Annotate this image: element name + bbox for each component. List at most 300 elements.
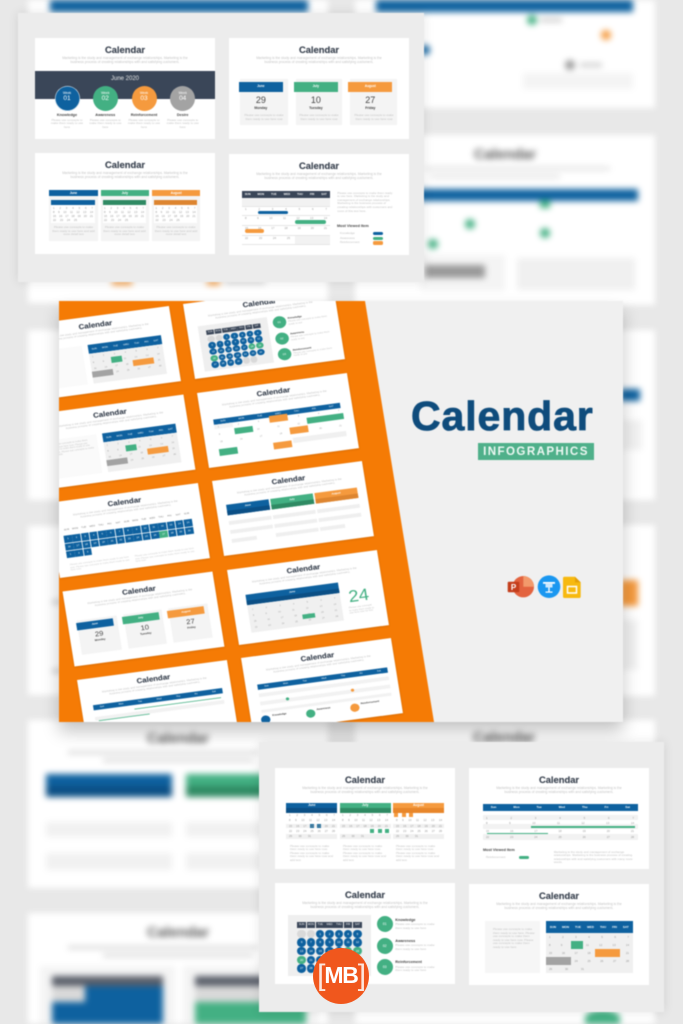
tilted slide: fifteen-day grid: 25 [145, 534, 148, 538]
tilted slide: dot calendar: Knowledge [287, 315, 302, 320]
slide: three date cards: Tuesday [309, 106, 323, 110]
highlighted dates [309, 812, 414, 834]
slide: dot calendar with knowledge list: 13 [300, 949, 303, 953]
week 04 circle: Week [178, 91, 187, 95]
weekday header: SUN MON TUE WED THU FRI SAT [245, 192, 327, 196]
slide: three month calendars: Marketing is the study and management of exchange relationships. Marketing is the business process of creating relationships with and satisfying customers. [62, 171, 188, 179]
tilted slide: fifteen-day grid: 26 [153, 533, 157, 536]
tilted slide: dot calendar: 03 [282, 352, 286, 356]
slide: June July August calendars: 15 16 17 18 19 20 21 [289, 824, 335, 828]
slide: three date cards: 10 [311, 95, 321, 105]
tilted slide: month with big 24: Marketing is the study and management of exchange relationships. Marketing is the business process of creating relationships with and satisfying customers. [252, 566, 357, 585]
slide: three date cards: Monday [254, 106, 267, 110]
month band [35, 71, 215, 98]
tilted slide: dot calendar: 26 [259, 350, 262, 353]
awareness item: 02 [383, 944, 387, 948]
slide: dot calendar with knowledge list: 30 [328, 966, 331, 970]
slide: three month calendars: 8 9 10 11 12 13 14 [156, 210, 196, 214]
slide: week with line bars: 15 16 17 18 19 20 21 [486, 829, 634, 833]
slide: three date cards: Please use concepts to make them ready to use here now [244, 113, 284, 121]
slide: dot calendar with knowledge list: Awareness [395, 939, 415, 943]
panel: bottom slide previews [259, 742, 664, 1012]
slide: dot calendar with knowledge list: Reinforcement [395, 960, 422, 964]
slide: dot calendar with knowledge list: THU [336, 923, 342, 926]
slide: three month calendars: 8 9 10 11 12 13 14 [53, 210, 93, 214]
slide: three date cards: Please use concepts to make them ready to use here now [354, 113, 394, 121]
tilted slide: fifteen-day grid: 15 [186, 521, 190, 524]
tilted slide: dot calendar: 23 [236, 353, 239, 357]
tilted slide: fifteen-day grid: 12 [161, 524, 164, 528]
tilted slide: fifteen-day grid: 27 [162, 532, 165, 535]
tilted slide: dot calendar: THU [239, 326, 244, 329]
tilted slide: date cards: Calendar [121, 584, 156, 596]
tilted slide: fifteen-day grid: WED [89, 524, 95, 528]
slide: three month calendars: Please use concepts to make them ready to use here and add more detail text [103, 225, 146, 236]
tilted slide: fifteen-day grid: 1 [69, 552, 71, 555]
tilted slide: dot calendar: 02 [280, 337, 284, 340]
hero subtitle badge: INFOGRAPHICS [483, 445, 589, 458]
tilted slide: fifteen-day grid: TUE [81, 525, 86, 529]
blue range [258, 211, 288, 214]
slide: month with range bars: 8 9 10 11 12 13 14 [245, 216, 327, 220]
tilted slide: week with event blocks: 8 9 10 11 12 13 14 [219, 416, 341, 436]
slide: schedule blocks: 15 16 17 18 19 20 21 [549, 951, 629, 955]
tilted slide: fifteen-day grid [48, 483, 210, 578]
slide: dot calendar with knowledge list: Please use concepts to make them ready to use here [395, 922, 434, 930]
reinforcement item [377, 959, 393, 975]
tilted slide: dot calendar: 6 [211, 343, 213, 347]
slide: week with line bars: Marketing is the study and management of exchange relationships. Marketing is the business process of creating relationships with and satisfying customers. [496, 786, 622, 794]
tilted slide: dot calendar: Please use concepts to make them ready to use [290, 330, 330, 341]
tilted slide: fifteen-day grid: Marketing is the study and management of exchange relationships. Marketing is the business process of creating relationships with and satisfying customers. [73, 499, 178, 518]
slide: dot calendar with knowledge list: 4 [347, 932, 349, 936]
week captions: Please use concepts to make them ready to use here [51, 118, 83, 129]
orange diagonal backdrop [58, 300, 435, 723]
logo badge: MB [313, 948, 369, 1004]
tilted slide: dot calendar: Please use concepts to make them ready to use [288, 314, 327, 325]
hero title: Calendar [411, 393, 594, 439]
tilted slide: week with event blocks: 1 2 3 4 5 6 7 [217, 409, 340, 428]
tilted slide: dot calendar: 01 [277, 321, 281, 324]
slide: dot calendar with knowledge list: 2 [329, 932, 330, 936]
tilted slide: month with big 24: 22 23 24 25 26 27 28 [255, 614, 338, 628]
tilted slide: month with big 24 [227, 550, 389, 645]
slide: June 2020 weeks: Calendar [105, 44, 145, 55]
tilted slide: fifteen-day grid: 9 [136, 528, 138, 531]
slide: dot calendar with knowledge list: 5 [357, 932, 358, 936]
slide: dot calendar with knowledge list: 8 [319, 940, 321, 944]
dot calendar [288, 915, 371, 976]
knowledge item [377, 916, 393, 932]
tilted slide: week with event blocks: 15 16 17 18 19 20 21 [220, 424, 342, 443]
tilted slide: fifteen-day grid: 3 [87, 550, 89, 553]
tilted slide: fifteen-day grid: 29 [179, 530, 182, 533]
slide: three month calendars: 15 16 17 18 19 20 21 [156, 214, 196, 218]
slide: three date cards [229, 38, 409, 139]
schedule grid [546, 933, 633, 973]
tilted slide: dot calendar: 2 [234, 334, 235, 337]
tilted slide: fifteen-day grid: FRI [167, 514, 172, 517]
tilted slide: schedule 1: SUN MON TUE WED THU FRI SAT [91, 339, 158, 350]
hero subtitle badge [478, 443, 594, 460]
tilted slide: fifteen-day grid: 3 [84, 535, 86, 538]
week 02 circle: Week [101, 91, 109, 95]
slide: three date cards: Friday [365, 106, 375, 110]
week 02 circle: 02 [102, 95, 109, 102]
tilted slide: week with markers: Knowledge [272, 712, 287, 717]
tilted slide: fifteen-day grid: 10 [144, 527, 147, 530]
tilted slide: date cards: Marketing is the study and management of exchange relationships. Marketing is the business process of creating relationships with and satisfying customers. [87, 588, 192, 607]
icon: Keynote [536, 574, 562, 599]
slide: schedule blocks: 8 9 10 11 12 13 14 [549, 943, 629, 947]
slide: June July August calendars: 8 9 10 11 12 13 14 [289, 818, 335, 822]
tilted slide: schedule 1: 8 9 10 11 12 13 14 [93, 352, 160, 364]
slide: three month calendars: Please use concepts to make them ready to use here and add more detail text [155, 225, 197, 236]
icon: PowerPoint: P [511, 583, 517, 592]
slide: June July August calendars: 8 9 10 11 12 13 14 [396, 818, 442, 822]
slide: dot calendar with knowledge list: 24 [337, 958, 340, 962]
slide: month with range bars: 1 2 3 4 5 6 7 [245, 207, 327, 211]
tilted slide: dot calendar: 21 [220, 355, 224, 359]
tilted slide: dot calendar: 3 [241, 333, 243, 336]
slide: dot calendar with knowledge list: 7 [310, 940, 312, 944]
slide: three month calendars: 8 9 10 11 12 13 14 [104, 210, 144, 214]
tilted slide: fifteen-day grid: MON [72, 526, 78, 530]
week captions: Reinforcement [131, 113, 157, 117]
week 03 circle: Week [140, 91, 148, 95]
week 04 circle [170, 86, 195, 111]
bullet notes: Please use concepts to make them ready to use here now. Please use concepts to make them ready to use here now and add text. [290, 844, 333, 862]
slide: dot calendar with knowledge list: 22 [319, 958, 322, 962]
slide: three month calendars: 22 23 24 25 [156, 218, 180, 222]
tilted slide: fifteen-day grid: 30 [188, 528, 191, 532]
slide: dot calendar with knowledge list: 12 [356, 940, 359, 944]
slide: three month calendars: 22 23 24 25 [53, 218, 77, 222]
tilted slide: week with line bars: Marketing is the study and management of exchange relationships. Marketing is the business process of creating relationships with and satisfying customers. [102, 676, 207, 695]
panel: hero cover [59, 301, 623, 722]
slide: dot calendar with knowledge list: 27 [300, 966, 303, 970]
tilted slide: fifteen-day grid: 4 [93, 533, 95, 537]
slide: month with range bars: Knowledge [340, 230, 355, 234]
awareness item [377, 938, 393, 954]
slide: three date cards: 29 [256, 95, 266, 105]
slide: June July August calendars: Please use concepts to make them ready to use here now. Please use concepts to make them ready to use here now and add text. [343, 844, 386, 862]
tilted slide: dot calendar: 22 [228, 354, 231, 358]
tilted slide: dot calendar: 17 [243, 346, 246, 349]
tilted slide: fifteen-day grid: 23 [128, 536, 131, 540]
tilted slide: dot calendar: 11 [249, 338, 252, 342]
tilted slide: dot calendar: 25 [251, 351, 255, 354]
week 04 circle: 04 [179, 95, 186, 102]
slide: dot calendar with knowledge list: 26 [356, 958, 359, 962]
slide: dot calendar with knowledge list: 23 [328, 958, 331, 962]
slide: schedule blocks: Marketing is the study and management of exchange relationships. Marketing is the business process of creating relationships with and satisfying customers. [496, 902, 622, 910]
orange range [245, 229, 264, 233]
slide: June July August calendars: 29 30 31 [396, 834, 418, 838]
week captions: Desire [177, 113, 188, 117]
tilted slide: week with line bars: Calendar [136, 672, 171, 685]
slide: week with line bars [469, 768, 649, 869]
July card: July [313, 84, 319, 88]
June card: June [257, 84, 265, 88]
tilted slide: three months: June [244, 503, 251, 507]
slide: week with line bars: Calendar [539, 774, 579, 785]
tilted slide: week with event blocks [197, 373, 359, 468]
tilted slide: dot calendar: Reinforcement [292, 346, 312, 351]
tilted slide: week with markers: Marketing is the study and management of exchange relationships. Marketing is the business process of creating relationships with and satisfying customers. [266, 654, 371, 673]
slide: dot calendar with knowledge list: 17 [337, 949, 340, 953]
slide: June July August calendars: Please use concepts to make them ready to use here now. Please use concepts to make them ready to use here now and add text. [396, 844, 439, 862]
slide: dot calendar with knowledge list: SUN [299, 923, 304, 926]
tilted slide: fifteen-day grid: 24 [136, 535, 139, 539]
week 01 circle [54, 86, 80, 111]
slide: three month calendars: 1 2 3 4 5 6 7 [156, 206, 196, 210]
tilted slide: month with big 24: Please use concepts to make them ready to use here now for text [348, 603, 374, 614]
tilted slide: week with markers: Sun Mon Tue Wed Thu Fri Sat [264, 669, 381, 688]
tilted slide: schedule 2: SUN MON TUE WED THU FRI SAT [106, 427, 173, 439]
tilted slide: month with big 24: 1 2 3 4 5 6 7 [252, 597, 336, 611]
slide: dot calendar with knowledge list: MON [308, 923, 314, 926]
tilted slide: date cards: 10 [140, 623, 150, 632]
slide: dot calendar with knowledge list: 25 [346, 958, 350, 962]
tilted slide: dot calendar: 19 [258, 344, 261, 347]
slide: three month calendars: 15 16 17 18 19 20 21 [53, 214, 93, 218]
tilted slide: dot calendar: SAT [254, 324, 259, 327]
tilted slide: week with markers [241, 638, 403, 733]
tilted slide: week with markers: Awareness [316, 706, 331, 711]
tilted slide: fifteen-day grid: 13 [169, 523, 173, 526]
blurred background slides: Calendar [474, 147, 536, 163]
slide: June July August calendars: 22 23 24 25 26 27 28 [396, 829, 442, 833]
slide: week with line bars: 1 2 3 4 5 6 7 [486, 816, 634, 820]
tilted slide: dot calendar: 10 [242, 339, 245, 343]
knowledge item: 01 [383, 922, 387, 926]
slide: week with line bars: 22 23 24 25 26 27 28 [486, 835, 634, 839]
tilted slide: fifteen-day grid: 18 [85, 542, 88, 546]
tilted slide: fifteen-day grid: THU [158, 515, 164, 519]
tilted slide: schedule 2: Calendar [92, 407, 127, 419]
tilted slide: three months: Marketing is the study and management of exchange relationships. Marketing is the business process of creating relationships with and satisfying customers. [237, 477, 342, 496]
blurred background slides: Calendar [147, 925, 209, 941]
tilted slide: fifteen-day grid: SAT [175, 513, 181, 516]
slide: dot calendar with knowledge list: 18 [346, 949, 350, 953]
tilted slide: fifteen-day grid: 5 [101, 532, 103, 536]
slide: dot calendar with knowledge list: 1 [319, 932, 321, 936]
tilted slide: date cards: Tuesday [140, 631, 152, 635]
tilted slide: month with big 24: 8 9 10 11 12 13 14 [253, 603, 336, 617]
tilted slide: date cards [62, 572, 224, 667]
June header [286, 803, 337, 813]
tilted slide: fifteen-day grid: 2 [78, 551, 80, 554]
slide: three date cards: Marketing is the study and management of exchange relationships. Marketing is the business process of creating relationships with and satisfying customers. [256, 56, 382, 64]
slide: June July August calendars: 29 30 31 [342, 834, 364, 838]
slide: week with line bars: Reinforcement [486, 854, 506, 858]
slide: dot calendar with knowledge list [275, 883, 455, 984]
tilted slide: week with event blocks: Calendar [256, 385, 291, 398]
tilted slide: dot calendar: 29 [229, 361, 232, 364]
slide: three month calendars [35, 153, 215, 254]
slide: month with range bars: Reinforcement [340, 240, 360, 244]
slide: schedule blocks: 29 30 31 [549, 967, 584, 971]
tilted slide: month with big 24: Calendar [286, 562, 321, 575]
tilted slide: dot calendar: 30 [237, 360, 240, 363]
tilted slide: fifteen-day grid: 14 [178, 522, 181, 525]
tilted slide: fifteen-day grid: 28 [170, 531, 174, 534]
slide: dot calendar with knowledge list: 11 [347, 940, 350, 944]
tilted slide: dot calendar: 5 [257, 331, 259, 334]
tilted slide: fifteen-day grid: Please use concepts to make them ready to use here now. Please use concepts to make them ready to use here now. [70, 555, 130, 571]
tilted slide: week with markers: Reinforcement [360, 700, 379, 705]
slide: three month calendars: 1 2 3 4 5 6 7 [53, 206, 93, 210]
slide: schedule blocks: 22 23 24 25 26 27 28 [549, 959, 629, 963]
slide: month with range bars: Calendar [299, 160, 339, 171]
June card [239, 82, 283, 92]
tilted slide: week with event blocks: SUN MON TUE WED THU FRI SAT [220, 404, 334, 423]
weekday header: Sun Mon Tue Wed Thu Fri Sat [491, 805, 630, 809]
tilted slide: dot calendar: 4 [249, 332, 251, 335]
slide: dot calendar with knowledge list: FRI [346, 923, 350, 926]
slide: month with range bars: Please use concepts to make them ready to use here. Marketing is the study and management of exchange relationships. Marketing is the business process of creating relationships with customers and more of this text here. [337, 191, 392, 213]
week captions: Knowledge [57, 113, 77, 117]
most viewed item: Most Viewed Item [483, 848, 515, 852]
blurred background slides: Calendar [147, 731, 209, 747]
slide: dot calendar with knowledge list: 9 [329, 940, 330, 944]
August card: August [365, 84, 376, 88]
notes box [485, 921, 540, 973]
tilted slide: week with line bars [77, 660, 239, 755]
tilted slide: dot calendar: 12 [257, 337, 260, 341]
slide: three month calendars: July [122, 191, 128, 195]
tilted slide: week with markers: Calendar [300, 650, 335, 663]
blurred background slides: Calendar [473, 730, 535, 746]
month band: June 2020 [111, 76, 139, 82]
tilted slide: dot calendar: 13 [212, 350, 215, 353]
tilted slide: schedule 1 [19, 306, 181, 401]
tilted slide: dot calendar: 15 [227, 348, 230, 351]
slide: dot calendar with knowledge list: 21 [309, 958, 313, 962]
tilted slide: week with line bars: Sun Mon Tue Wed Thu Fri Sat [99, 689, 216, 708]
tilted slide: fifteen-day grid: MON [132, 518, 138, 522]
tilted slide: fifteen-day grid: FRI [107, 522, 112, 525]
weekday header [546, 921, 633, 933]
gray event [546, 957, 571, 965]
August header [393, 803, 444, 813]
tilted slide: date cards: Monday [94, 637, 106, 641]
tilted slide: three months [212, 461, 374, 556]
week 01 circle: Week [63, 91, 71, 95]
slide: dot calendar with knowledge list: 10 [337, 940, 340, 944]
tilted slide: fifteen-day grid: 1 [67, 537, 69, 540]
tilted slide: dot calendar: TUE [223, 328, 228, 331]
slide: three date cards: Please use concepts to make them ready to use here now [299, 113, 339, 121]
slide: month with range bars: 15 16 17 18 19 20 21 [245, 226, 327, 230]
tilted slide: dot calendar: SUN [208, 330, 213, 333]
reinforcement item: 03 [383, 965, 387, 969]
tilted slide: month with big 24: 15 16 17 18 19 20 21 [254, 608, 337, 623]
August header: August [413, 803, 424, 807]
tilted slide: dot calendar: WED [231, 327, 236, 330]
tilted slide: fifteen-day grid: 22 [119, 538, 122, 541]
slide: dot calendar with knowledge list: 19 [356, 949, 359, 953]
green event [571, 941, 583, 949]
slide: week with line bars: 8 9 10 11 12 13 14 [486, 820, 634, 824]
week captions: Please use concepts to make them ready to use here [167, 118, 199, 129]
slide: dot calendar with knowledge list: 20 [300, 958, 303, 962]
slide: dot calendar with knowledge list: 28 [309, 966, 313, 970]
slide: June July August calendars: 15 16 17 18 19 20 21 [396, 824, 442, 828]
tilted slide: date cards: August [181, 610, 191, 614]
tilted slide: three months: August [331, 491, 341, 495]
July header: July [362, 803, 368, 807]
slide: June July August calendars: 29 30 31 [289, 834, 311, 838]
slide: dot calendar with knowledge list: 3 [338, 932, 340, 936]
tilted slide: fifteen-day grid: 6 [110, 531, 112, 534]
July header [340, 803, 391, 813]
tilted slide: week with event blocks: Marketing is the study and management of exchange relationships. Marketing is the business process of creating relationships with and satisfying customers. [222, 389, 327, 408]
tilted slide: date cards: Friday [187, 625, 196, 629]
week 03 circle: 03 [140, 95, 148, 102]
tilted slide: fifteen-day grid: 11 [152, 525, 155, 529]
tilted slide: fifteen-day grid: 2 [76, 536, 77, 539]
tilted slide: schedule 1: 15 16 17 18 19 20 21 [94, 358, 161, 370]
tilted slide: fifteen-day grid: SUN [64, 528, 69, 531]
tilted slide: fifteen-day grid: 16 [68, 544, 71, 548]
slide: June July August calendars [275, 768, 455, 869]
tilted slide: fifteen-day grid: Please use concepts to make them ready to use here now. Please use concepts to make them ready to use here now. [135, 547, 195, 563]
tilted slide: schedule 2: Marketing is the study and management of exchange relationships. Marketing is the business process of creating relationships with and satisfying customers. [59, 411, 163, 430]
tilted slide: dot calendar [183, 284, 345, 379]
slide: dot calendar with knowledge list: Knowledge [395, 918, 416, 922]
slide: June July August calendars: 15 16 17 18 19 20 21 [342, 824, 388, 828]
icon: Google Slides [562, 576, 582, 599]
tilted slide: schedule 1: 1 2 3 4 5 6 7 [92, 346, 159, 358]
slide: June 2020 weeks: Marketing is the study and management of exchange relationships. Marketing is the business process of creating relationships with and satisfying customers. [62, 56, 188, 64]
tilted slide: dot calendar: 9 [235, 340, 236, 344]
slide: month with range bars: 22 23 24 25 [245, 236, 290, 240]
panel: top slide previews [18, 13, 424, 282]
slide: three date cards: Calendar [299, 44, 339, 55]
tilted slide: three months: July [289, 497, 295, 501]
tilted slide: fifteen-day grid: WED [149, 516, 155, 520]
tilted slide: dot calendar: 14 [219, 349, 223, 352]
tilted slide: dot calendar: Please use concepts to make them ready to use [293, 346, 332, 357]
slide: schedule blocks: Please use concepts to make them ready to use here. Please use concepts to make them ready to use here now. Please use concepts to make them ready to use here. [493, 927, 535, 949]
tilted slide: three months: Calendar [271, 473, 306, 486]
tilted slide: fifteen-day grid: SUN [124, 520, 129, 523]
tilted slide: schedule 2: 15 16 17 18 19 20 21 [108, 447, 175, 458]
week 02 circle [93, 86, 118, 111]
slide: month with range bars [229, 154, 409, 255]
tilted slide: month with big 24: June [289, 590, 295, 594]
big day number: 24 [347, 585, 370, 606]
July card [294, 82, 338, 92]
weekday header: SUN MON TUE WED THU FRI SAT [550, 925, 629, 929]
week captions [51, 112, 199, 129]
week captions: Awareness [95, 113, 115, 117]
tilted slide: dot calendar: 28 [221, 362, 225, 365]
slide: month with range bars: Marketing is the study and management of exchange relationships. Marketing is the business process of creating relationships with and satisfying customers. [256, 172, 382, 180]
slide: June July August calendars: 1 2 3 4 5 6 7 [342, 813, 388, 817]
slide: three month calendars: 15 16 17 18 19 20 21 [104, 214, 144, 218]
tilted slide: dot calendar: 7 [219, 342, 221, 346]
slide: dot calendar with knowledge list: WED [326, 923, 333, 926]
tilted slide: dot calendar: 27 [214, 363, 217, 366]
tilted slide: schedule 1: Calendar [78, 318, 113, 331]
weekday header [483, 804, 638, 811]
slide: schedule blocks: Calendar [539, 890, 579, 901]
slide: dot calendar with knowledge list: Please use concepts to make them ready to use here [395, 943, 434, 951]
tilted slide: dot calendar: 16 [235, 347, 238, 350]
